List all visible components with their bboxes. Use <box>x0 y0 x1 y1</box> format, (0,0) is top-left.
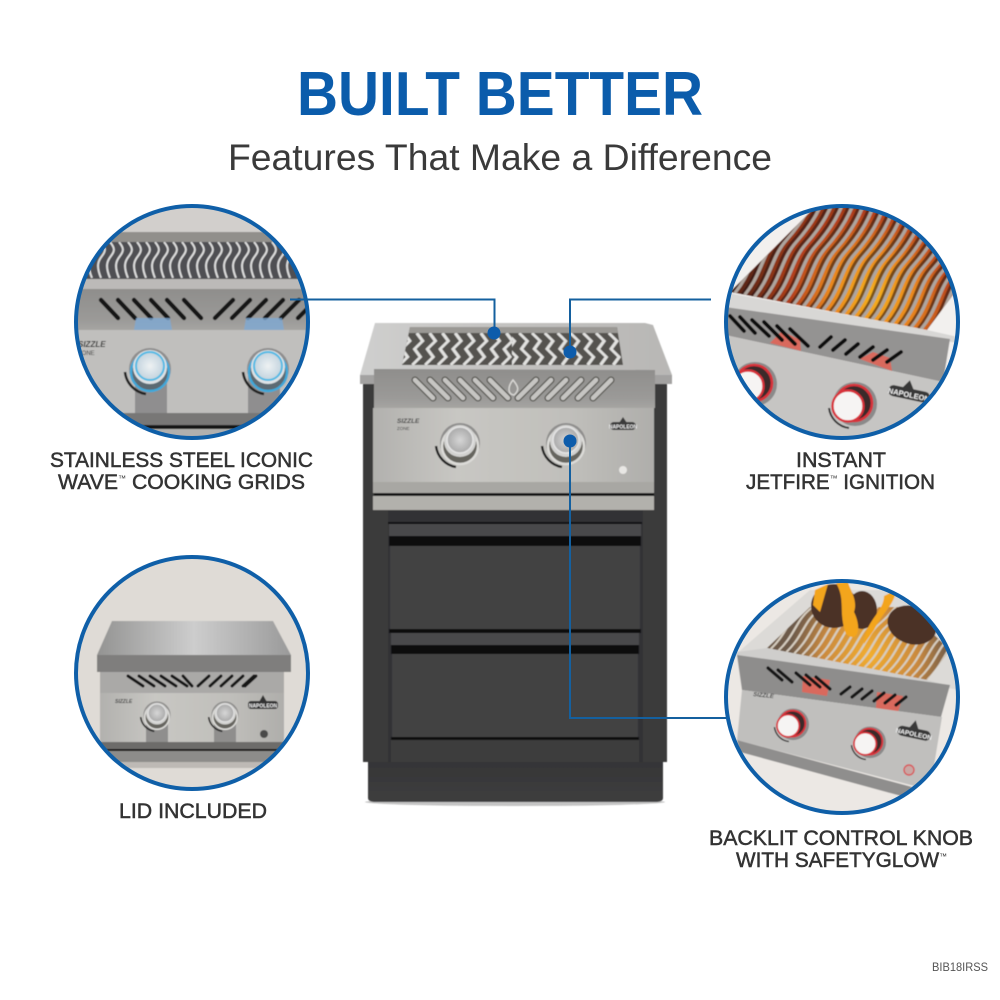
red glow <box>802 676 903 712</box>
knob right <box>542 423 586 467</box>
vent band <box>737 655 950 717</box>
cabinet shadow <box>365 798 665 806</box>
Napoleon badge <box>895 717 935 742</box>
knob left <box>125 348 171 394</box>
front vent band <box>374 369 655 408</box>
Napoleon badge: NAPOLEON <box>887 386 931 404</box>
knob left <box>436 423 480 467</box>
lower drawer <box>391 633 639 762</box>
cabinet base plinth <box>368 760 663 802</box>
knob right <box>209 701 239 731</box>
label: cooking grids: COOKING GRIDS <box>126 471 305 494</box>
subtitle: Features That Make a Difference <box>228 137 772 178</box>
control panel <box>729 336 940 436</box>
label: backlit knob: ™ <box>939 852 947 861</box>
vent band <box>725 307 950 382</box>
lid top <box>97 621 291 655</box>
label: jetfire ignition: ™ <box>830 474 838 483</box>
circle ring: jetfire ignition <box>726 206 958 438</box>
label: backlit knob <box>709 827 973 872</box>
circle: lid included <box>78 559 306 787</box>
Napoleon badge: NAPOLEON <box>249 704 278 710</box>
blue glow <box>134 318 284 330</box>
control panel <box>737 690 942 790</box>
product: grill cabinet <box>360 323 672 806</box>
knob left <box>738 362 778 404</box>
Napoleon badge: NAPOLEON <box>609 424 638 430</box>
circle: jetfire ignition <box>728 208 956 436</box>
control panel <box>373 408 654 482</box>
knob right <box>243 348 289 394</box>
cooking grid <box>400 327 624 365</box>
circle: backlit knob <box>728 583 956 811</box>
label: cooking grids <box>50 449 313 494</box>
knob left <box>141 701 171 731</box>
front lip <box>737 648 933 682</box>
callout line: jetfire ignition <box>564 300 711 358</box>
red glow <box>770 331 892 371</box>
sizzle zone mark: SIZZLE <box>115 699 133 705</box>
knob right <box>851 726 886 760</box>
flames <box>813 582 896 644</box>
sizzle zone mark: SIZZLE <box>397 418 420 425</box>
grid with flames <box>766 606 948 680</box>
label: jetfire ignition: JETFIRE <box>746 471 831 494</box>
vent slots <box>730 316 901 362</box>
upper drawer <box>388 522 642 633</box>
cabinet body <box>363 378 667 762</box>
sizzle zone mark: SIZZLE <box>753 692 775 700</box>
brand flame mark <box>509 380 518 395</box>
burner vent band <box>100 672 284 693</box>
knob right <box>829 382 877 428</box>
circle: cooking grids: ZONE <box>78 351 95 357</box>
ignition button <box>260 730 268 738</box>
front lip <box>728 293 958 343</box>
ignition light <box>619 466 627 474</box>
label: cooking grids: STAINLESS STEEL ICONIC <box>50 449 313 472</box>
steel top surround <box>360 323 672 384</box>
model number: BIB18IRSS <box>932 960 988 974</box>
control panel <box>100 693 284 742</box>
Napoleon badge <box>609 417 638 430</box>
sizzle zone mark: SIZZLE <box>78 340 106 349</box>
label: cooking grids: WAVE <box>58 471 118 494</box>
callout line: cooking grids <box>290 300 500 340</box>
title: BUILT BETTER <box>297 60 703 129</box>
control panel <box>70 330 310 414</box>
knob left <box>774 708 809 742</box>
lower band <box>737 740 912 797</box>
lid front <box>97 655 291 672</box>
label: jetfire ignition <box>746 449 935 494</box>
label: lid included: LID INCLUDED <box>119 800 267 823</box>
steaks <box>810 584 936 646</box>
circle ring: backlit knob <box>726 581 958 813</box>
vent slots <box>768 668 906 705</box>
product: grill cabinet: ZONE <box>397 426 410 431</box>
label: backlit knob: WITH SAFETYGLOW <box>736 849 941 872</box>
circle: cooking grids <box>78 208 306 436</box>
top plate <box>735 590 960 690</box>
label: jetfire ignition: INSTANT <box>796 449 886 472</box>
vent slots <box>415 380 611 398</box>
flaming grid <box>732 208 953 330</box>
label: cooking grids: ™ <box>118 474 126 483</box>
circle ring: cooking grids <box>76 206 308 438</box>
label: jetfire ignition: IGNITION <box>838 471 935 494</box>
label: backlit knob: BACKLIT CONTROL KNOB <box>709 827 973 850</box>
Napoleon badge <box>248 695 278 710</box>
safety glow button <box>904 765 914 775</box>
Napoleon badge: NAPOLEON <box>895 727 933 742</box>
callout line: backlit knob <box>564 434 726 718</box>
circle ring: lid included <box>76 557 308 789</box>
vent slots <box>101 300 316 318</box>
